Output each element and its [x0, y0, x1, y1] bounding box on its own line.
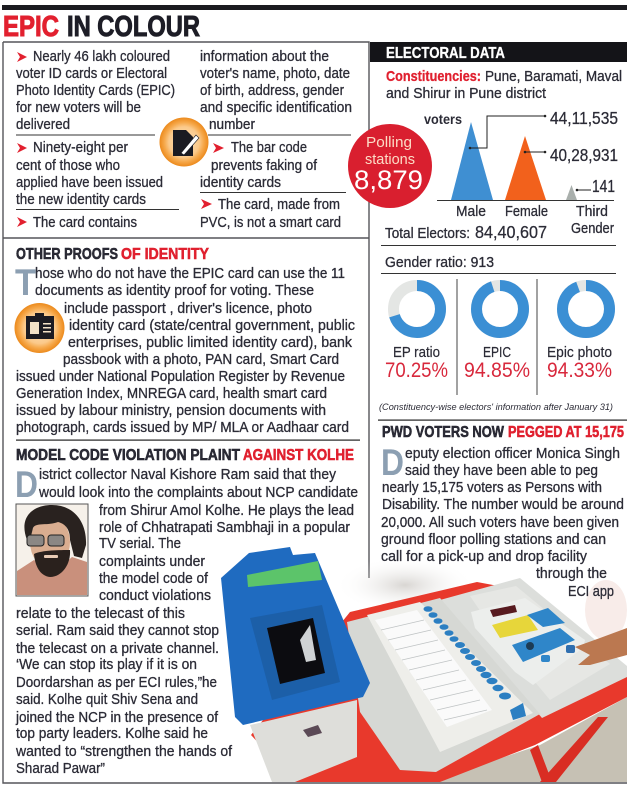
- body text: include passport , driver's licence, photo: [64, 300, 312, 317]
- body text: [15, 466, 358, 777]
- body text: wanted to “strengthen the hands of: [15, 743, 233, 760]
- right column text: identity cards: [200, 174, 281, 191]
- callout: polling stations: 8,879: [354, 165, 423, 195]
- body text: istrict collector Naval Kishore Ram said that they: [39, 466, 336, 483]
- VVPAT lid: [221, 547, 370, 725]
- body text: role of Chhatrapati Sambhaji in a popular: [99, 519, 350, 536]
- control unit: [471, 598, 585, 685]
- right column text: and specific identification: [200, 99, 352, 116]
- red table: [251, 582, 627, 782]
- PWD body text: nearly 15,175 voters as Persons with: [382, 479, 602, 496]
- PWD body text: ECI app: [568, 583, 614, 600]
- photo: Amol Kolhe: [16, 504, 88, 596]
- header bar: ELECTORAL DATA: [386, 45, 505, 62]
- heading: AGAINST KOLHE: [243, 447, 354, 464]
- donut: Epic photo: 94.33%: [547, 359, 612, 382]
- body text: Doordarshan as per ECI rules,”he: [16, 674, 217, 691]
- constituencies text: Pune, Baramati, Maval: [485, 68, 622, 85]
- total electors: 84,40,607: [475, 222, 547, 242]
- PWD body text: ground floor polling stations and can: [381, 531, 606, 548]
- chart: voters by gender: voters: [424, 111, 462, 127]
- chart: voters by gender: [424, 108, 618, 237]
- PWD body text: call for a pick-up and drop facility: [381, 548, 587, 565]
- heading: OTHER PROOFS: [16, 246, 118, 263]
- body text: Sharad Pawar”: [16, 760, 105, 777]
- left tray: [347, 598, 540, 772]
- left column text: Photo Identity Cards (EPIC): [16, 82, 175, 99]
- drop cap: D: [15, 464, 38, 505]
- drop cap: T: [15, 262, 36, 303]
- left column text: cent of those who: [16, 157, 120, 174]
- right column text: of birth, address, gender: [200, 82, 344, 99]
- left column text: Ninety-eight per: [33, 139, 128, 156]
- top rule: [2, 5, 627, 10]
- panel: PWD voters: [378, 420, 627, 483]
- chart: voters by gender: 44,11,535: [550, 108, 618, 128]
- chart: voters by gender: Male: [456, 203, 486, 220]
- constituencies text: Constituencies:: [386, 68, 481, 85]
- body text: serial. Ram said they cannot stop: [16, 622, 219, 639]
- panel: other proofs of identity: [14, 246, 355, 436]
- icon: identity badge: [14, 303, 64, 353]
- PWD body text: eputy election officer Monica Singh: [405, 445, 620, 462]
- PWD body text: through the: [536, 565, 607, 582]
- donut: EP ratio: 70.25%: [385, 359, 448, 382]
- body text: passbook with a photo, PAN card, Smart Card: [63, 351, 339, 368]
- callout: polling stations: stations: [365, 151, 415, 168]
- callout: polling stations: Polling: [366, 134, 412, 151]
- total electors: [385, 222, 547, 242]
- right column text: prevents faking of: [211, 157, 318, 174]
- body text: joined the NCP in the presence of: [15, 709, 219, 726]
- body text: hose who do not have the EPIC card can use the 11: [35, 265, 345, 282]
- constituencies text: and Shirur in Pune district: [386, 85, 547, 102]
- footnote: (Constituency-wise electors' information after January 31): [379, 402, 613, 413]
- left column text: Nearly 46 lakh coloured: [33, 48, 170, 65]
- body text: conduct violations: [99, 587, 211, 604]
- drop cap: D: [381, 442, 404, 483]
- body text: issued by labour ministry, pension documents with: [16, 402, 326, 419]
- body text: TV serial. The: [99, 535, 181, 552]
- photo: voting machines: [221, 547, 627, 782]
- body text: relate to the telecast of this: [16, 605, 185, 622]
- chart: voters by gender: Third: [576, 203, 608, 220]
- chart: voters by gender: 141: [592, 176, 615, 196]
- floor: [430, 697, 627, 782]
- right column text: PVC, is not a smart card: [200, 214, 341, 231]
- total electors: Total Electors:: [385, 225, 470, 242]
- panel: model code violation: [15, 447, 358, 777]
- chart: voters by gender: Female: [505, 203, 548, 220]
- left column text: voter ID cards or Electoral: [16, 65, 167, 82]
- icon: document and pen: [160, 118, 208, 166]
- body text: said. Kolhe quit Shiv Sena and: [16, 691, 198, 708]
- title: EPIC: [3, 11, 59, 43]
- body text: photograph, cards issued by MP/ MLA or Aadhaar card: [16, 419, 349, 436]
- hand: [575, 628, 627, 665]
- body text: complaints under: [99, 553, 205, 570]
- section rule: [16, 440, 360, 441]
- panel: EPIC facts: [16, 48, 352, 231]
- right tray: [440, 578, 627, 718]
- gender ratio: Gender ratio: 913: [385, 254, 494, 271]
- right column text: voter's name, photo, date: [200, 65, 350, 82]
- header bar: [370, 42, 627, 62]
- chart: voters by gender: 40,28,931: [550, 145, 618, 165]
- body text: the model code of: [99, 570, 209, 587]
- body text: top party leaders. Kolhe said he: [16, 725, 208, 742]
- donut: EP ratio: [385, 286, 448, 382]
- photo backdrop: [335, 557, 475, 613]
- heading: [16, 246, 210, 263]
- chart: voters by gender: Gender: [571, 220, 614, 237]
- constituencies text: [386, 68, 622, 102]
- body text: would look into the complaints about NCP candidate: [38, 484, 358, 501]
- right column text: [200, 48, 352, 231]
- PWD body text: said they have been able to peg: [405, 462, 598, 479]
- left column text: The card contains: [33, 214, 137, 231]
- left column text: the new identity cards: [16, 191, 146, 208]
- heading: [382, 424, 624, 441]
- panel: electoral data: [370, 42, 627, 413]
- donut: EPIC: EPIC: [483, 344, 511, 361]
- body text: Generation Index, MNREGA card, health smart card: [16, 385, 327, 402]
- body text: issued under National Population Register by Revenue: [16, 368, 345, 385]
- left column text: [16, 48, 179, 231]
- heading: OF IDENTITY: [121, 246, 210, 263]
- right column text: The card, made from: [218, 196, 340, 213]
- heading: PWD VOTERS NOW: [382, 424, 504, 441]
- donut: Epic photo: [547, 286, 612, 382]
- PWD body text: [381, 445, 624, 600]
- right column text: information about the: [200, 48, 329, 65]
- right column text: number: [209, 116, 255, 133]
- left column text: applied have been issued: [16, 174, 163, 191]
- donut: EP ratio: EP ratio: [393, 344, 440, 361]
- donut: EPIC: 94.85%: [464, 359, 530, 382]
- VVPAT body: [250, 700, 357, 782]
- body text: identity card (state/central government, public: [69, 317, 355, 334]
- left column text: for new voters will be: [16, 99, 141, 116]
- body text: enterprises, public limited identity card), bank: [68, 334, 352, 351]
- title: [3, 11, 200, 43]
- title: IN COLOUR: [67, 11, 200, 43]
- donut: EPIC: [464, 286, 530, 382]
- ballot unit: [367, 602, 533, 752]
- left column text: delivered: [16, 116, 70, 133]
- donut: Epic photo: Epic photo: [547, 344, 612, 361]
- heading: MODEL CODE VIOLATION PLAINT: [16, 447, 240, 464]
- right column text: The bar code: [231, 139, 307, 156]
- body text: [16, 265, 355, 436]
- body text: ‘We can stop its play if it is on: [16, 656, 197, 673]
- body text: documents as identity proof for voting. These: [35, 282, 314, 299]
- ballot buttons: [424, 606, 511, 700]
- body text: from Shirur Amol Kolhe. He plays the lead: [99, 502, 354, 519]
- body text: the telecast on a private channel.: [16, 640, 219, 657]
- callout: polling stations: [348, 124, 432, 208]
